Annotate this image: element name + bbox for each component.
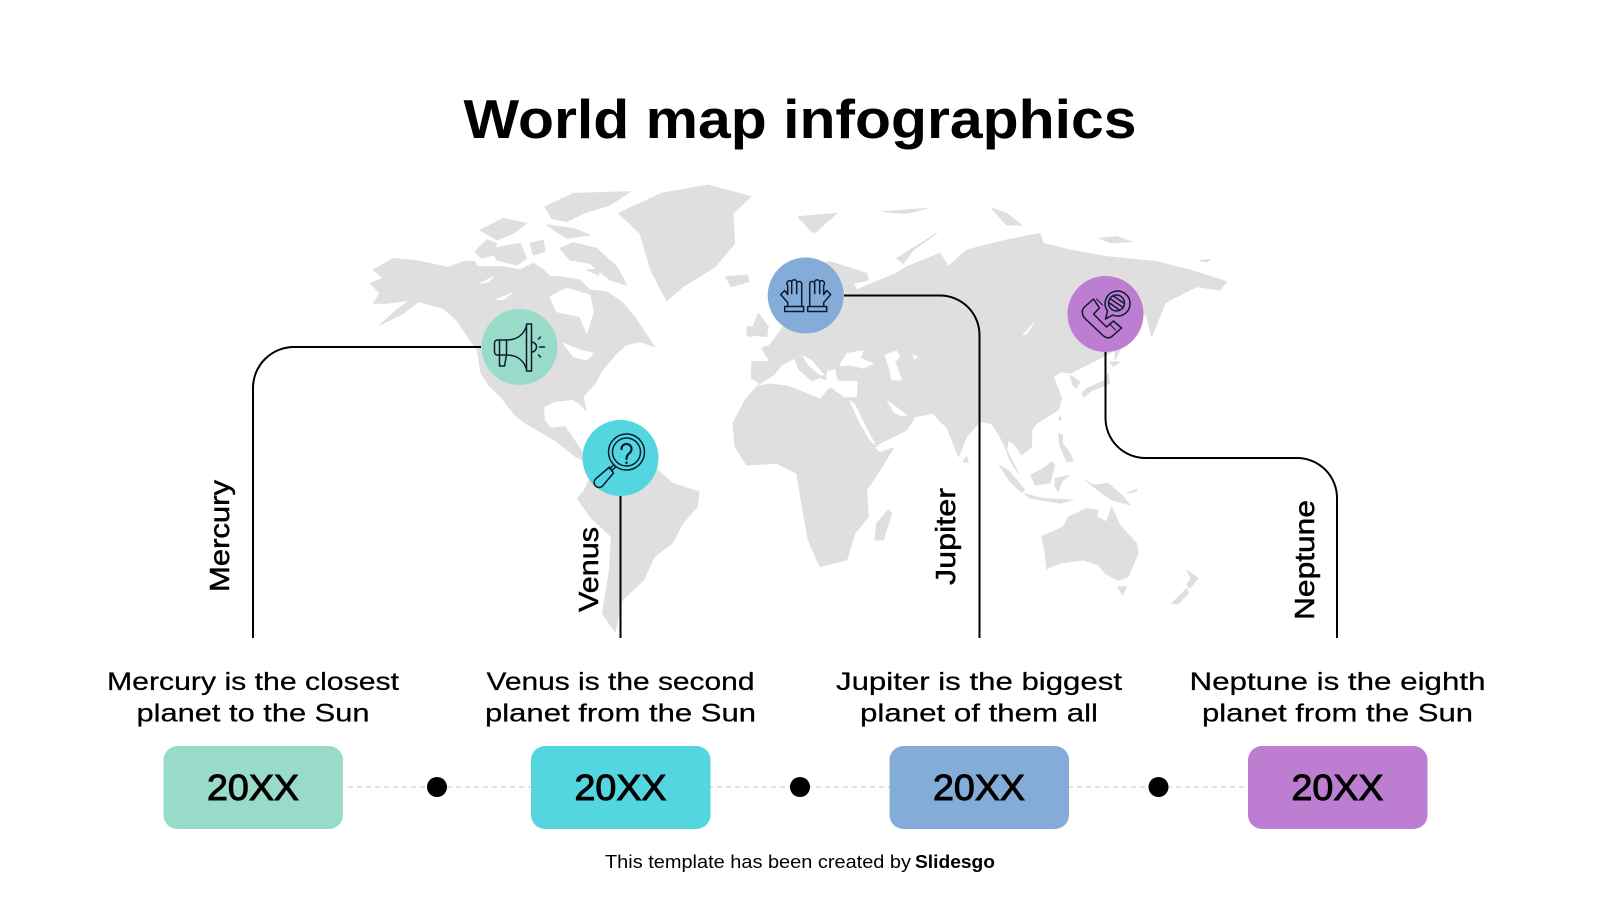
year box: Jupiter <box>890 746 1069 829</box>
timeline dot 3 <box>1148 777 1168 797</box>
icon: gloves <box>781 280 831 312</box>
connector: Mercury <box>253 347 481 638</box>
vertical label: Venus: Venus <box>573 527 604 612</box>
vertical label: Jupiter: Jupiter <box>930 488 961 585</box>
year box: Mercury: 20XX <box>207 767 299 808</box>
vertical label: Neptune: Neptune <box>1289 500 1320 620</box>
description: Venus <box>485 668 756 728</box>
footer credit: This template has been created by <box>605 852 911 872</box>
timeline dot 1 <box>427 777 447 797</box>
connector: Venus <box>620 496 622 638</box>
year box: Mercury <box>164 746 343 829</box>
description: Neptune: planet from the Sun <box>1202 700 1473 728</box>
connector: Neptune <box>1106 352 1337 638</box>
marker: Venus magnifier <box>582 420 658 496</box>
description: Venus: planet from the Sun <box>485 700 756 728</box>
icon: magnifier with question mark <box>594 434 644 487</box>
year box: Neptune <box>1248 746 1428 829</box>
description: Mercury: planet to the Sun <box>136 700 370 728</box>
timeline dashed line <box>348 786 1244 788</box>
year box: Jupiter: 20XX <box>933 767 1025 808</box>
connector: Jupiter <box>844 296 980 638</box>
description: Neptune: Neptune is the eighth <box>1190 668 1486 696</box>
marker: Mercury megaphone <box>482 309 558 385</box>
year box: Venus <box>531 746 710 829</box>
icon: telephone with prohibited speech bubble <box>1082 291 1130 338</box>
marker: Neptune phone <box>1068 276 1144 352</box>
description: Jupiter: planet of them all <box>860 700 1098 728</box>
description: Jupiter: Jupiter is the biggest <box>836 668 1122 696</box>
year box: Neptune: 20XX <box>1292 767 1384 808</box>
description: Jupiter <box>836 668 1122 728</box>
description: Mercury: Mercury is the closest <box>107 668 399 696</box>
description: Neptune <box>1190 668 1486 728</box>
footer credit: Slidesgo <box>915 852 995 872</box>
world map <box>370 185 1227 632</box>
icon: megaphone <box>494 324 544 371</box>
year box: Venus: 20XX <box>574 767 666 808</box>
title: World map infographics <box>464 88 1136 150</box>
marker: Jupiter gloves <box>768 258 844 334</box>
description: Mercury <box>107 668 399 728</box>
vertical label: Mercury: Mercury <box>204 480 235 592</box>
description: Venus: Venus is the second <box>486 668 754 696</box>
timeline dot 2 <box>790 777 810 797</box>
